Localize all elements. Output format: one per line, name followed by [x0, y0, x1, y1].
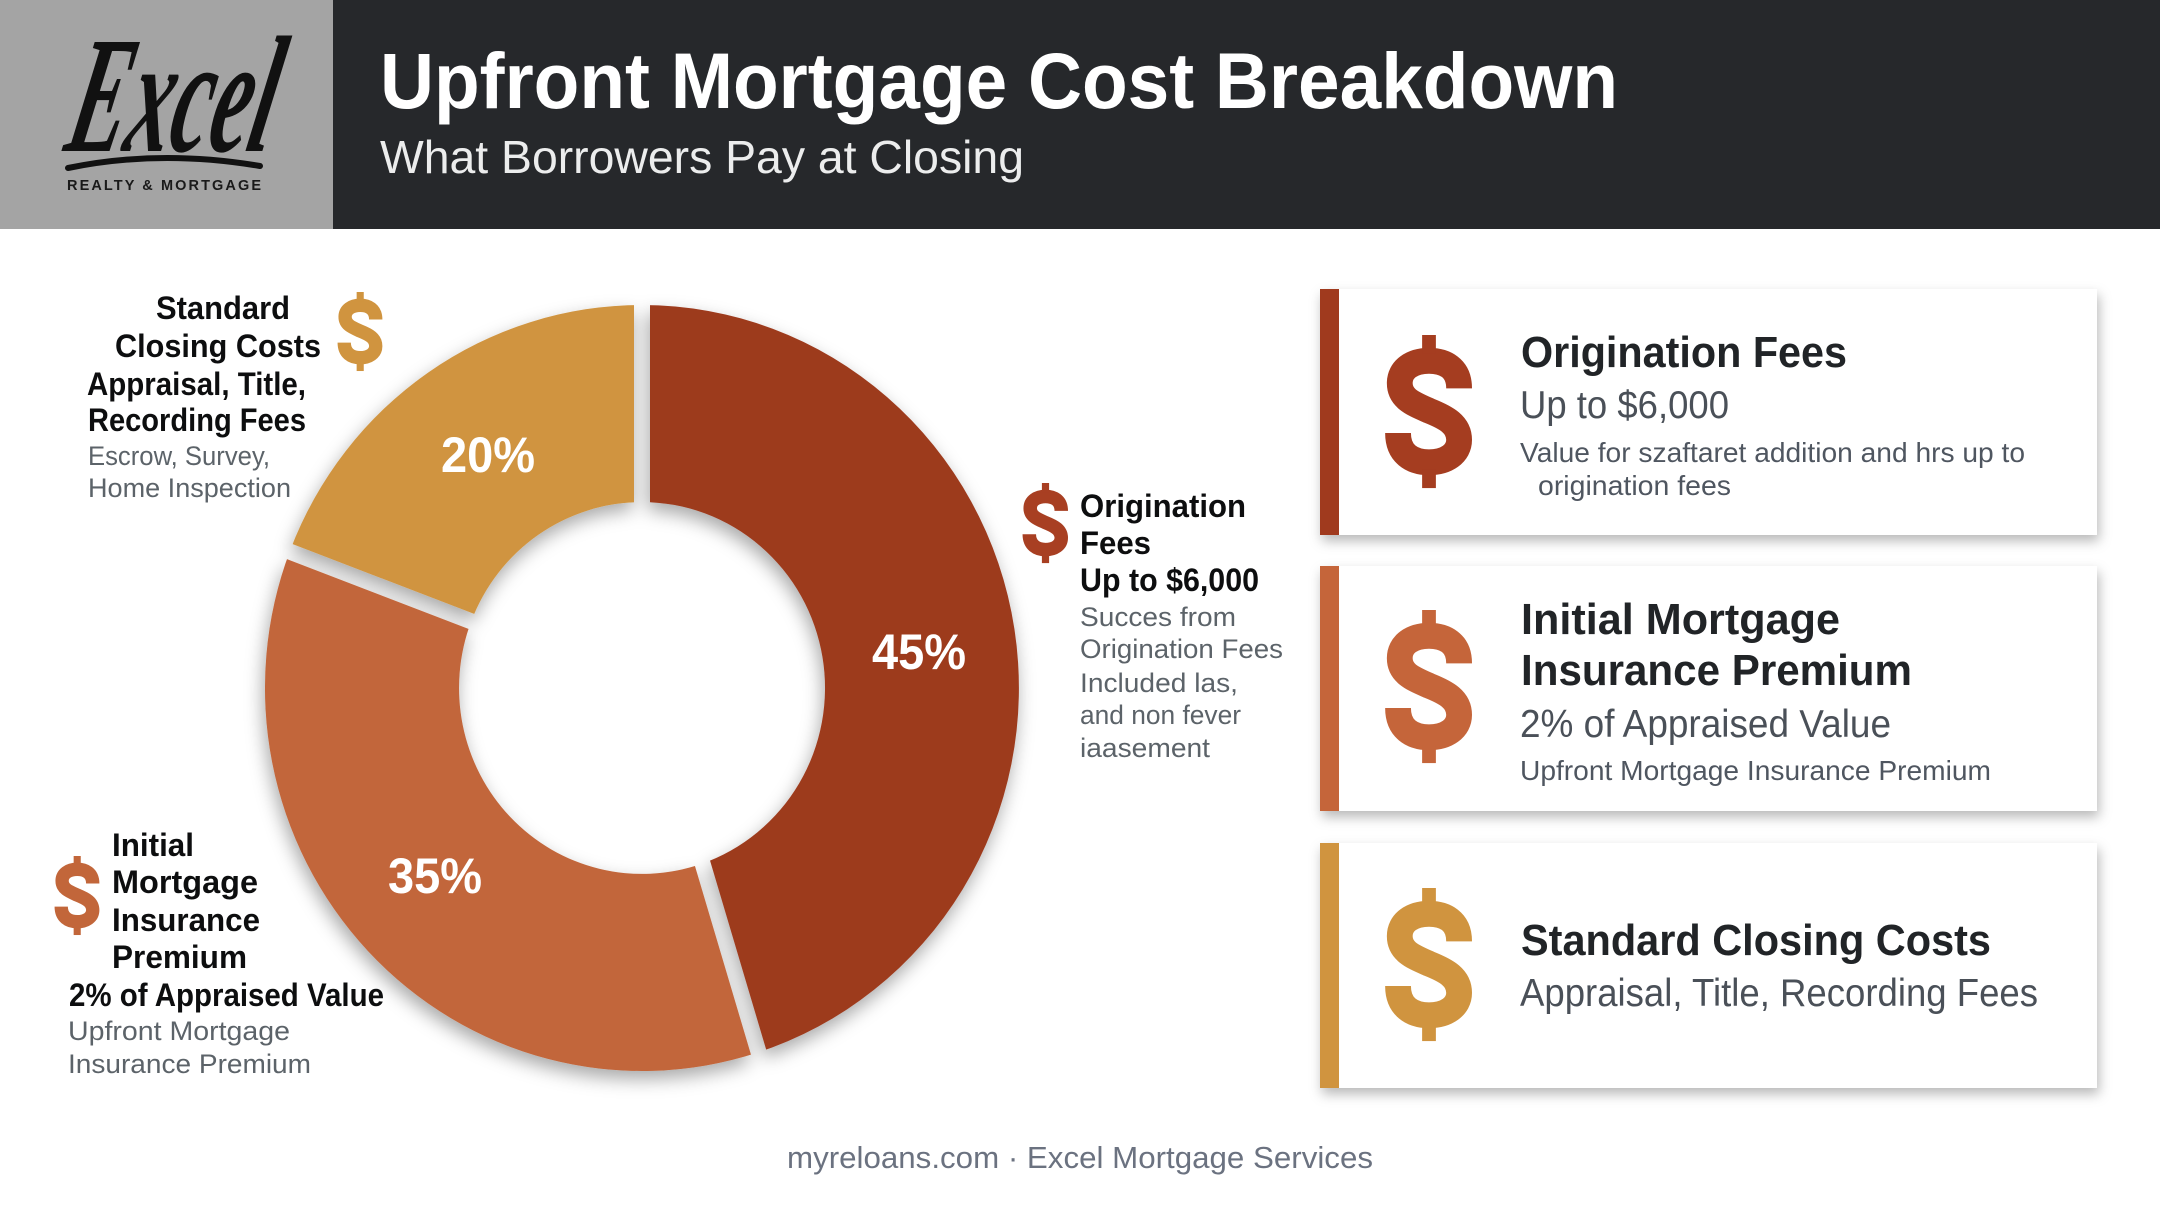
card heading: Origination Fees — [1521, 328, 1847, 377]
callout: origination fees — [1029, 483, 1283, 763]
callout text: Upfront Mortgage — [68, 1016, 290, 1046]
callout text: 2% of Appraised Value — [69, 977, 384, 1013]
card heading — [1521, 595, 1912, 695]
logo panel — [0, 0, 333, 229]
callout text: Appraisal, Title, — [87, 366, 306, 402]
header band — [0, 0, 2160, 229]
callout text — [68, 827, 384, 1079]
callout text: Initial — [112, 827, 194, 863]
callout: standard closing costs — [87, 290, 376, 503]
card heading: Standard Closing Costs — [1521, 916, 1991, 965]
segment: standard closing costs 20% — [290, 305, 642, 621]
callout text: Included las, — [1080, 668, 1238, 698]
panel: standard closing costs card — [1320, 843, 2097, 1088]
icon: dollar — [1398, 888, 1459, 1041]
card description — [1520, 437, 2025, 501]
callout text: Succes from — [1080, 602, 1236, 632]
callout text: Origination — [1080, 488, 1246, 524]
segment: initial mortgage insurance premium 35% — [265, 551, 757, 1071]
panel: origination fees card — [1320, 289, 2097, 535]
panel: initial mortgage insurance premium card — [1320, 566, 2097, 811]
callout text: Origination Fees — [1080, 634, 1283, 664]
title: Upfront Mortgage Cost Breakdown — [380, 36, 1618, 125]
callout text: Recording Fees — [88, 402, 306, 438]
callout text: Home Inspection — [88, 473, 291, 503]
percent label 45%: 45% — [872, 624, 966, 680]
card amount: 2% of Appraised Value — [1520, 703, 1891, 746]
percent label 35%: 35% — [388, 848, 482, 904]
card description: Upfront Mortgage Insurance Premium — [1520, 755, 1991, 786]
card heading: Initial Mortgage — [1521, 595, 1840, 644]
card description: Value for szaftaret addition and hrs up to — [1520, 437, 2025, 468]
callout text: Mortgage — [112, 864, 258, 900]
icon: dollar — [1398, 335, 1459, 488]
callout text: Standard — [156, 290, 290, 326]
card amount: Up to $6,000 — [1520, 384, 1729, 427]
subtitle: What Borrowers Pay at Closing — [380, 131, 1024, 183]
callout text: and non fever — [1080, 700, 1241, 730]
callout text — [87, 290, 321, 503]
callout text: iaasement — [1080, 733, 1211, 763]
logo swoosh — [68, 158, 260, 168]
footer: myreloans.com · Excel Mortgage Services — [787, 1140, 1373, 1175]
icon: dollar — [1029, 483, 1061, 563]
icon: dollar — [1398, 610, 1459, 763]
callout text: Premium — [112, 939, 247, 975]
callout text: Fees — [1080, 525, 1151, 561]
logo script wordmark: Excel — [53, 3, 300, 187]
logo tagline: REALTY & MORTGAGE — [67, 178, 261, 194]
callout: initial mortgage insurance premium — [61, 827, 384, 1079]
percent label 20%: 20% — [441, 427, 535, 483]
callout text: Up to $6,000 — [1080, 562, 1259, 598]
card heading: Insurance Premium — [1521, 646, 1912, 695]
callout text: Closing Costs — [115, 328, 321, 364]
callout text: Escrow, Survey, — [88, 441, 270, 471]
callout text — [1080, 488, 1283, 763]
callout text: Insurance Premium — [68, 1049, 311, 1079]
segment: origination fees 45% — [642, 305, 1019, 1053]
icon: dollar — [344, 292, 376, 371]
icon: dollar — [61, 856, 93, 935]
card description: origination fees — [1538, 470, 1731, 501]
donut chart — [265, 305, 1019, 1071]
callout text: Insurance — [112, 902, 260, 938]
card amount: Appraisal, Title, Recording Fees — [1520, 972, 2038, 1015]
